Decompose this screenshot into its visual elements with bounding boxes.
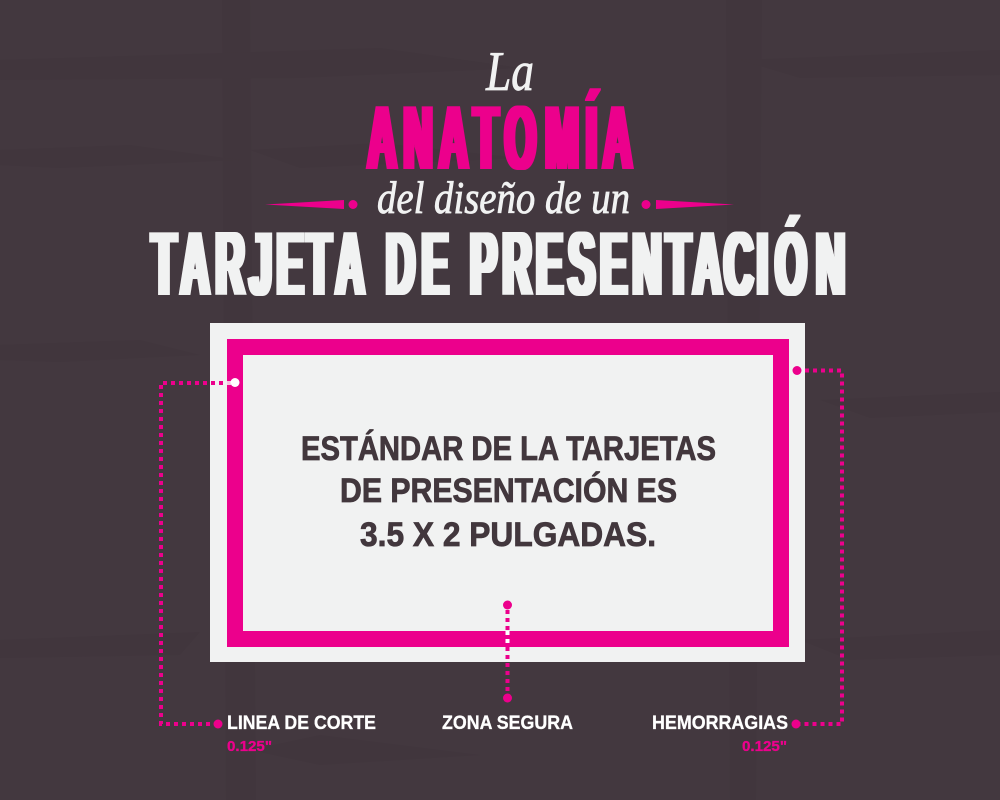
title: TARJETA DE PRESENTACIÓN: TARJETA DE PRESENTACIÓN xyxy=(152,212,845,314)
connector: hemorragias xyxy=(792,366,842,728)
card text xyxy=(301,430,716,554)
label: hemorragias: 0.125" xyxy=(742,739,787,755)
label: linea de corte: LINEA DE CORTE xyxy=(227,713,376,734)
label: hemorragias xyxy=(652,713,788,755)
label: hemorragias: HEMORRAGIAS xyxy=(652,713,788,734)
card text: DE PRESENTACIÓN ES xyxy=(340,472,677,510)
card text: ESTÁNDAR DE LA TARJETAS xyxy=(301,430,716,468)
connector: linea de corte xyxy=(161,378,240,728)
pink bleed frame xyxy=(227,339,789,647)
title: ANATOMÍA: ANATOMÍA xyxy=(368,86,632,188)
ornament: left spike and dot xyxy=(265,200,358,209)
title: La: La xyxy=(485,41,534,103)
business card xyxy=(210,323,805,662)
label: linea de corte: 0.125" xyxy=(227,739,272,755)
label: linea de corte xyxy=(227,713,376,755)
label: zona segura: ZONA SEGURA xyxy=(442,713,573,734)
title: del diseño de un: del diseño de un xyxy=(377,172,630,223)
ornament: right spike and dot xyxy=(642,200,734,209)
connector: zona segura xyxy=(503,600,512,702)
card text: 3.5 X 2 PULGADAS. xyxy=(360,516,656,554)
